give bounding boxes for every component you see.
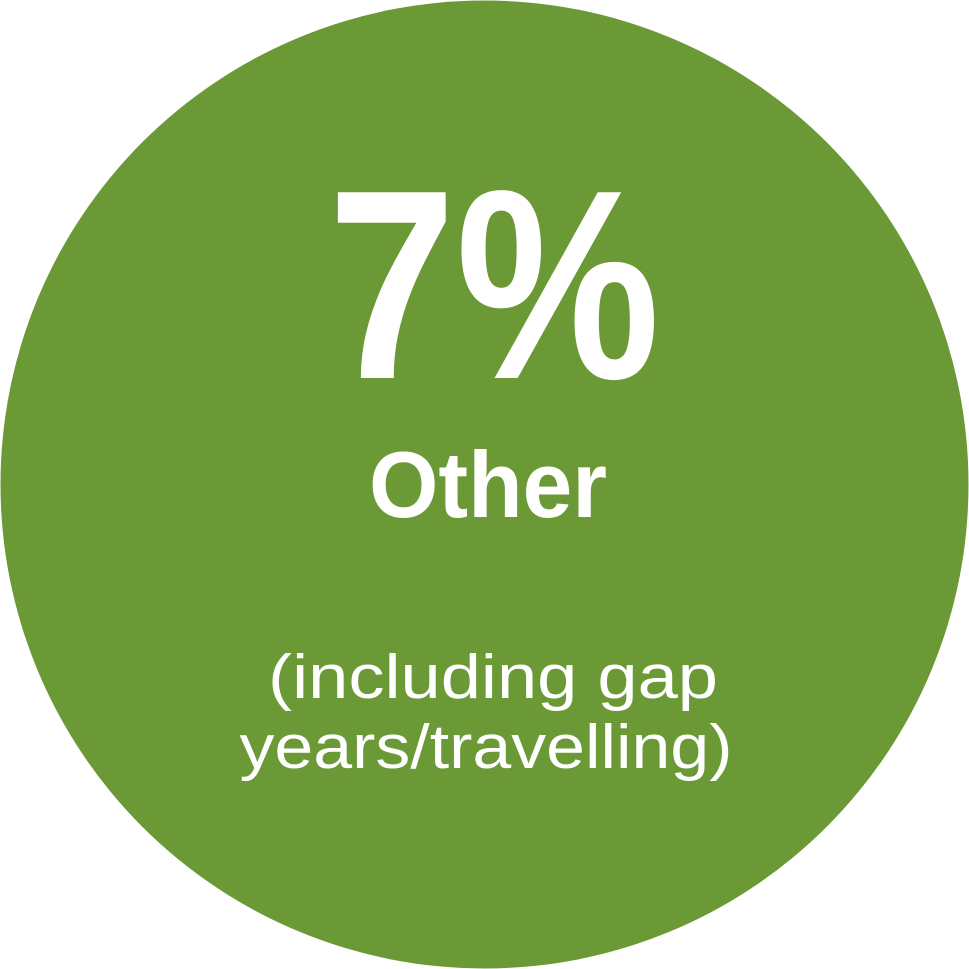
subtext line 1: (including gap — [268, 643, 718, 712]
big percentage: 7% — [328, 135, 660, 436]
heading: Other: Other — [369, 432, 607, 537]
subtext line 2: years/travelling) — [240, 713, 732, 782]
